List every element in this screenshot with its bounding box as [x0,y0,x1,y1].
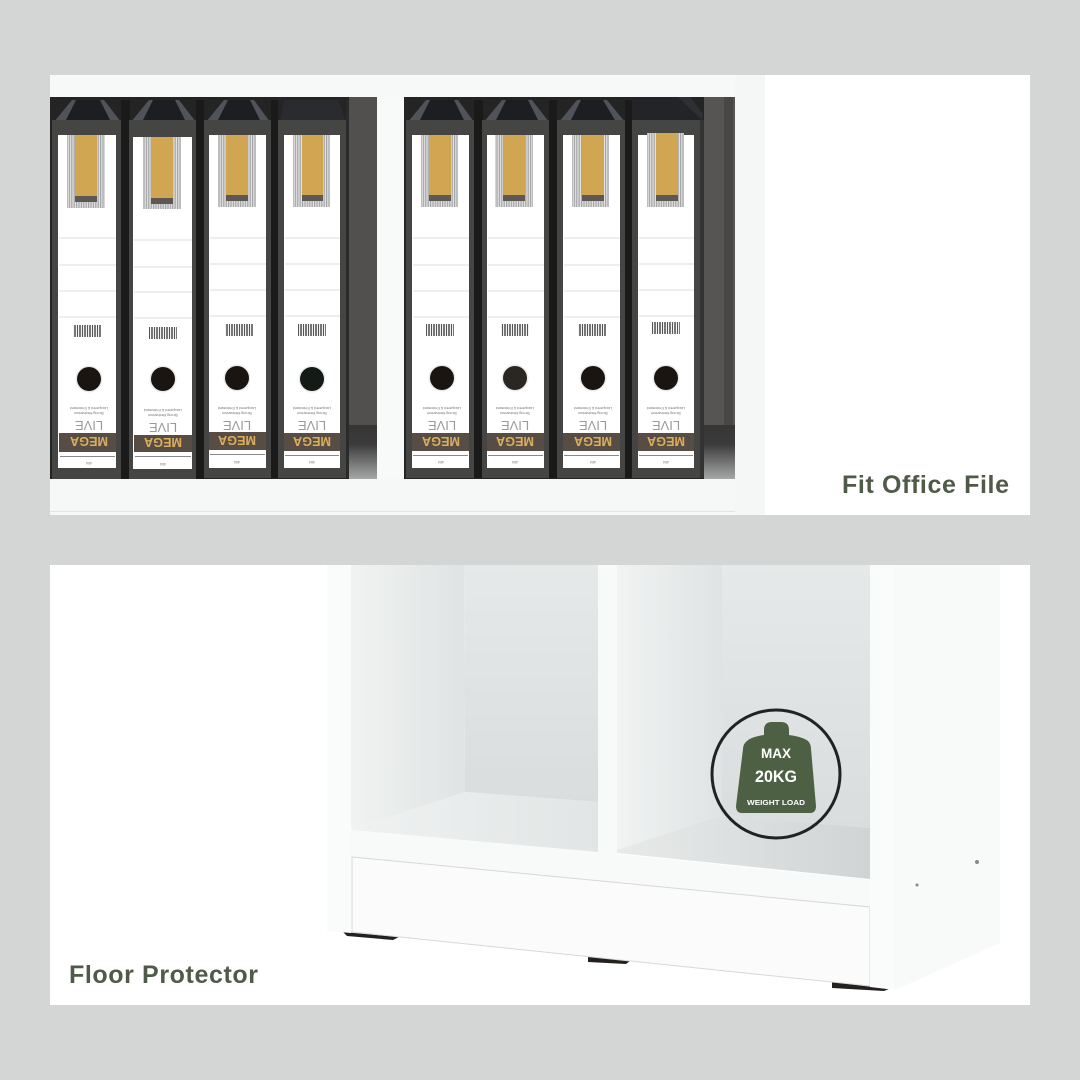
binder 3: LIVE [223,418,251,433]
binder 5: 404 [438,460,444,464]
binder 8: LIVE [652,418,680,433]
binder 7: Lacquered & Embossed [574,406,612,410]
cabinet left side board [327,565,351,933]
binder 4: Strong Mechanism [297,411,327,415]
binder 4: Lacquered & Embossed [293,406,331,410]
binder 4: MEGA [292,434,331,449]
shelf gaps [349,425,377,480]
binder 3: Strong Mechanism [222,411,252,415]
binder 6: MEGA [495,434,534,449]
heading: fit office file: Fit Office File [842,471,1009,499]
cabinet centre divider [377,97,404,481]
cabinet centre divider [598,565,617,855]
binder 4: LIVE [298,418,326,433]
cabinet front rail [351,830,870,907]
binder 1: 404 [86,461,92,465]
binder 8: Strong Mechanism [651,411,681,415]
binder 6: Strong Mechanism [500,411,530,415]
cabinet shelf [50,479,735,515]
binder 5: MEGA [421,434,460,449]
cabinet interior [50,97,735,481]
binder 7: LIVE [579,418,607,433]
binder 2: Strong Mechanism [148,413,178,417]
binder 2 [129,100,204,479]
cabinet side panel [895,565,1000,990]
cabinet feet [343,932,889,991]
binder 2: Lacquered & Embossed [144,408,182,412]
icon: weight [736,722,816,813]
binder 2: LIVE [149,420,177,435]
binder 3: 404 [234,460,240,464]
binder 7: MEGA [573,434,612,449]
cabinet right side board [735,75,765,515]
binder 8: Lacquered & Embossed [647,406,685,410]
binder 7: Strong Mechanism [578,411,608,415]
binder 2: MEGA [143,435,182,450]
panel: fit office file [50,75,1030,515]
panel: floor protector [50,565,1030,1005]
badge: max 20kg weight load [712,710,840,838]
binder 7 [557,100,632,478]
cabinet right front board [870,565,895,990]
binder 6: LIVE [501,418,529,433]
badge: max 20kg weight load: 20KG [755,768,797,786]
binder 5 [406,100,483,478]
cabinet plinth board [352,857,870,986]
binder 8: MEGA [646,434,685,449]
binder 5: LIVE [428,418,456,433]
binder 5: Strong Mechanism [427,411,457,415]
binder 6: Lacquered & Embossed [496,406,534,410]
binder 4 [278,100,349,478]
binder 6: 404 [512,460,518,464]
binder 4: 404 [309,460,315,464]
binder 6 [482,100,557,478]
badge: max 20kg weight load: WEIGHT LOAD [747,798,806,807]
binder 2: 404 [160,462,166,466]
binder 8 [632,97,704,478]
cabinet right compartment [617,565,870,879]
binder 1: Lacquered & Embossed [70,406,108,410]
heading: floor protector: Floor Protector [69,961,258,989]
cabinet top board [50,75,735,97]
binder 3: MEGA [217,433,256,448]
binder 7: 404 [590,460,596,464]
binder 3: Lacquered & Embossed [218,406,256,410]
binder 1: Strong Mechanism [74,411,104,415]
binder 1: LIVE [75,418,103,433]
binder 1: MEGA [69,434,108,449]
badge: max 20kg weight load: MAX [761,746,791,761]
cabinet left compartment [351,565,598,852]
binder 3 [204,100,278,478]
binder 8: 404 [663,460,669,464]
binder 5: Lacquered & Embossed [423,406,461,410]
binder 1 [52,100,130,479]
